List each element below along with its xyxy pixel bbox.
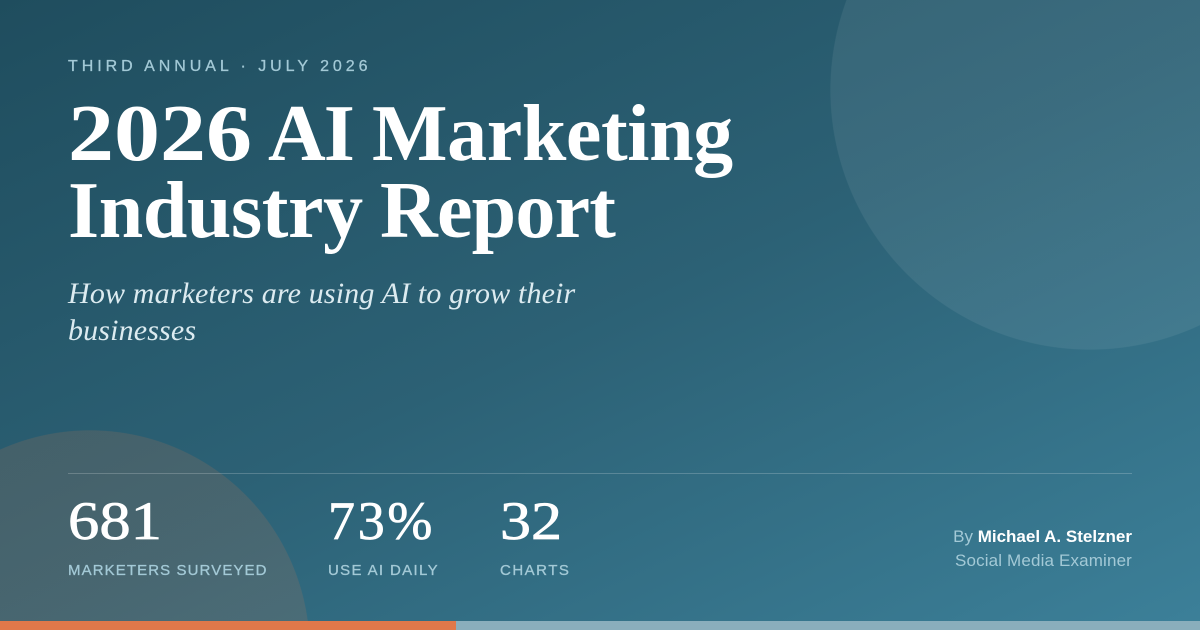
title: Report <box>380 167 615 255</box>
stat label: MARKETERS SURVEYED <box>68 562 268 579</box>
title: Industry <box>68 167 363 255</box>
eyebrow: THIRD ANNUAL · JULY 2026 <box>68 58 371 75</box>
stat number: 681 <box>68 491 162 551</box>
stat: marketers surveyed <box>68 491 268 579</box>
subtitle <box>68 277 576 347</box>
stat label: USE AI DAILY <box>328 562 439 579</box>
byline <box>953 527 1132 570</box>
bottom bar: orange segment <box>0 621 456 630</box>
stat number: 73% <box>328 491 435 551</box>
bottom bar: light segment <box>0 621 1200 630</box>
stat: charts <box>500 491 570 579</box>
divider <box>68 473 1132 474</box>
decorative circle: bottom left <box>0 430 310 630</box>
byline: Social Media Examiner <box>955 551 1132 570</box>
title: AI <box>268 90 353 178</box>
title: Marketing <box>372 90 733 178</box>
decorative circle: top right <box>830 0 1200 350</box>
title <box>68 90 733 255</box>
stat label: CHARTS <box>500 562 570 579</box>
stat: use AI daily <box>328 491 439 579</box>
byline: By Michael A. Stelzner <box>953 527 1132 546</box>
title: 2026 <box>68 90 252 178</box>
stat number: 32 <box>500 491 562 551</box>
subtitle: businesses <box>68 314 196 347</box>
subtitle: How marketers are using AI to grow their <box>68 277 575 310</box>
